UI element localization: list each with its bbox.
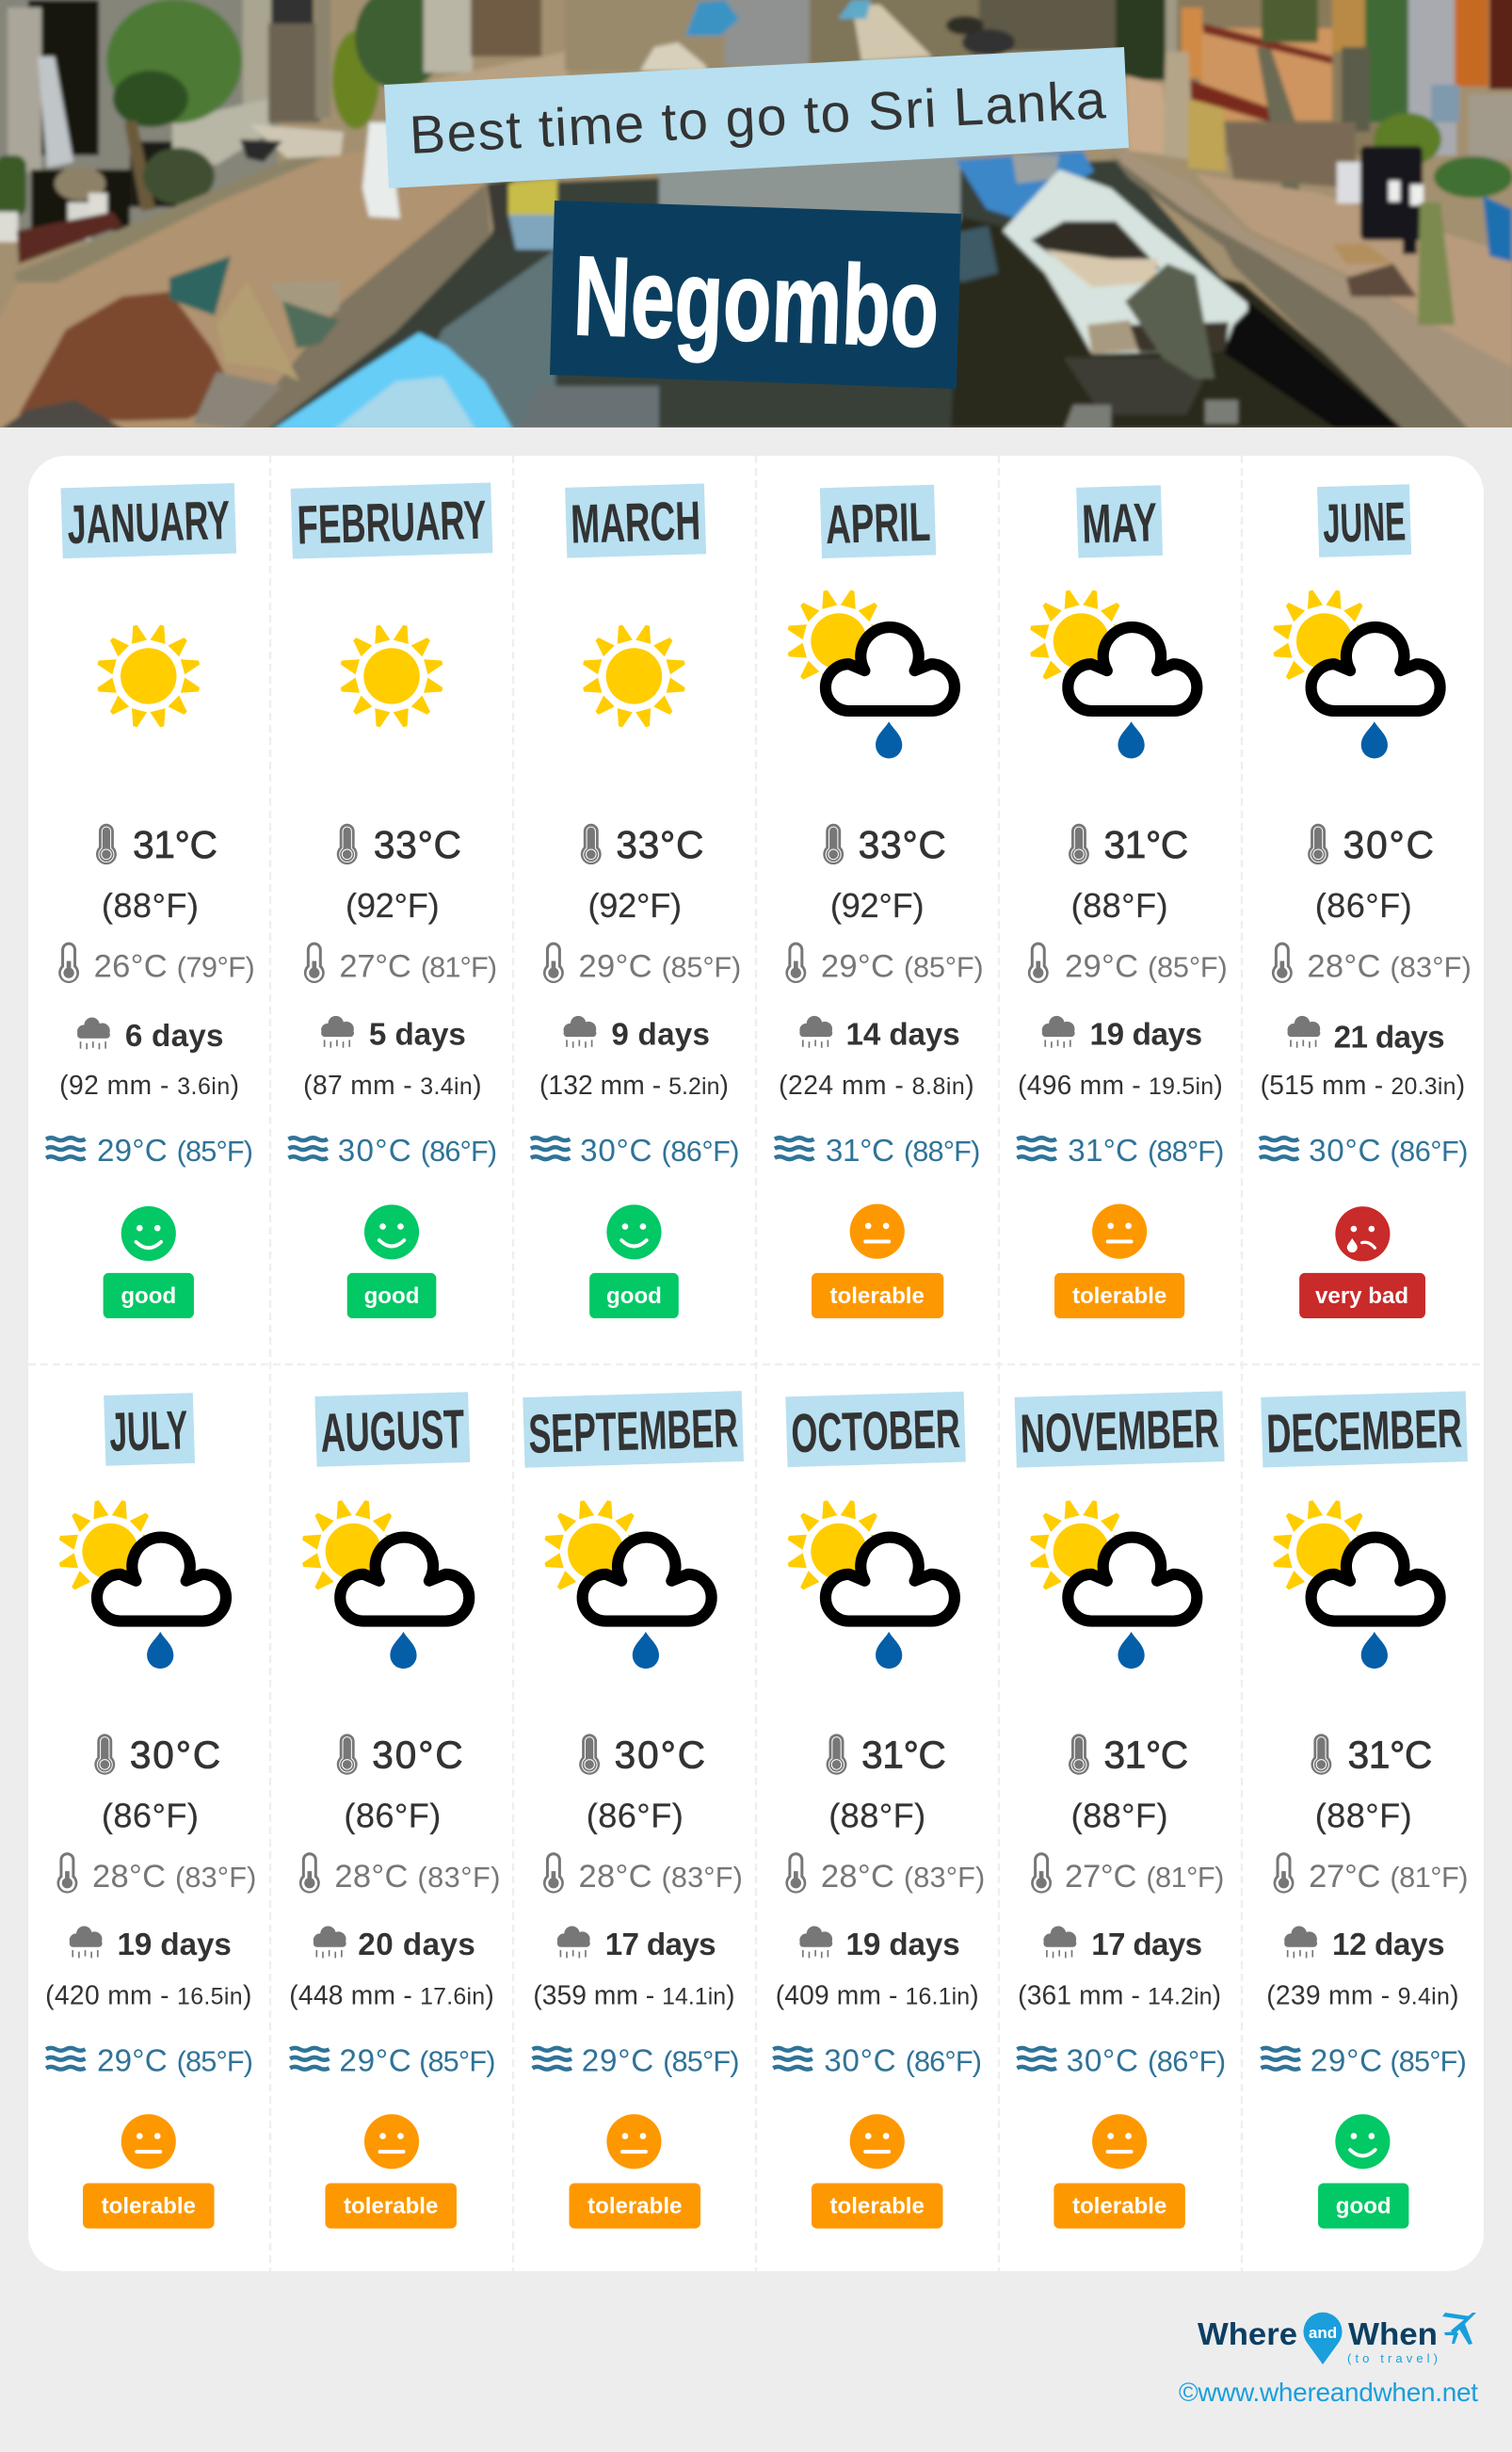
panel: November [1015,1391,1226,2229]
rating: very bad [1299,1206,1425,1318]
sea temperature: (86°F) [662,1135,740,1168]
sea temperature [1017,1134,1224,1169]
icon: sun [582,623,686,729]
high temperature: (88°F) [1315,1796,1412,1834]
low temperature: (83°F) [904,1861,985,1894]
high temperature [337,823,461,925]
logo: Where and When (to travel): When [1348,2316,1438,2351]
high temperature: 33°C [374,823,461,866]
rating: tolerable [812,1204,943,1318]
panel: April [775,485,984,1318]
city banner: Negombo: Negombo [571,233,941,371]
low temperature: (85°F) [1148,951,1228,984]
high temperature [1069,1734,1188,1834]
low temperature: 28°C [821,1859,894,1895]
rainfall: (361 mm - 14.2in) [1018,1980,1221,2010]
rating: tolerable: tolerable [1072,2194,1166,2219]
low temperature: (83°F) [175,1861,256,1894]
month label: September [523,1391,744,1468]
low temperature: 27°C [339,949,411,985]
rating: very bad: very bad [1315,1283,1408,1309]
sea temperature [1260,1134,1468,1169]
month label: August [314,1392,470,1467]
high temperature: 33°C [616,823,703,866]
high temperature [1069,823,1188,925]
month label: May: MAY [1081,492,1158,556]
low temperature: (81°F) [421,951,497,984]
rainfall: 5 days [369,1017,466,1052]
high temperature [827,1734,946,1834]
high temperature [94,1734,220,1834]
sea temperature: 30°C [824,2044,896,2079]
rating: tolerable: tolerable [587,2194,682,2219]
rainfall: (92 mm - 3.6in) [59,1070,239,1100]
white boat [956,151,1094,218]
rainfall [1261,1016,1465,1100]
month label: June: JUNE [1322,491,1407,555]
rainfall: (515 mm - 20.3in) [1261,1070,1465,1100]
panel: March [531,484,741,1318]
high temperature: (92°F) [346,886,440,925]
high temperature: 30°C [130,1734,220,1777]
sea temperature [533,2044,740,2079]
rainfall: (409 mm - 16.1in) [776,1980,979,2010]
high temperature [337,1734,463,1834]
rating: good: good [364,1283,419,1309]
month label: January [61,483,236,558]
low temperature: (85°F) [662,951,741,984]
panel: May [1017,485,1228,1318]
high temperature: (88°F) [1071,1796,1168,1834]
rainfall [1266,1926,1459,2010]
month label: March [565,484,706,558]
high temperature [1308,823,1434,925]
low temperature: 29°C [578,949,652,985]
low temperature [299,1852,500,1895]
low temperature [1031,1852,1224,1895]
low temperature: (85°F) [904,951,984,984]
low temperature: 26°C [94,949,168,985]
sea temperature: (85°F) [419,2045,495,2078]
rating: tolerable: tolerable [344,2194,438,2219]
high temperature: (88°F) [1071,886,1168,925]
rainfall: 19 days [118,1928,232,1962]
sea temperature: (85°F) [1390,2045,1467,2078]
month label: August: AUGUST [320,1398,465,1464]
sea temperature: (86°F) [1390,1135,1468,1168]
month label: July [104,1393,195,1466]
sea temperature [288,1134,497,1169]
high temperature: 30°C [1343,823,1434,866]
month label: April [820,485,936,558]
rainfall [289,1926,494,2010]
rating: tolerable [570,2114,700,2229]
low temperature: 28°C [334,1859,408,1895]
high temperature: 31°C [133,823,217,866]
panel: July [45,1393,256,2229]
rainfall: 20 days [358,1928,475,1962]
rainfall: 6 days [125,1019,223,1054]
header photo: canal in Negombo with moored boats [0,0,1512,433]
rating: good: good [1336,2194,1391,2219]
icon: sun and rain cloud [1029,1499,1197,1669]
icon: sun [96,623,201,729]
month label: February [291,483,492,559]
panel: January [46,483,255,1318]
sea temperature [531,1134,740,1169]
high temperature [1311,1734,1432,1834]
sea temperature: 30°C [1309,1134,1380,1169]
rainfall [45,1926,251,2010]
sea temperature: 31°C [1068,1134,1138,1169]
panel: February [288,483,497,1318]
rating: good: good [606,1283,662,1309]
sea temperature: (85°F) [177,1135,253,1168]
low temperature [304,943,497,985]
low temperature: 27°C [1309,1859,1380,1895]
rainfall: (132 mm - 5.2in) [539,1070,729,1100]
rainfall [533,1926,735,2010]
sea temperature [46,1134,253,1169]
rating: tolerable [1054,2114,1185,2229]
rainfall [1018,1016,1223,1100]
low temperature [1272,943,1472,985]
high temperature: 33°C [859,823,946,866]
rainfall [776,1926,979,2010]
high temperature [579,1734,705,1834]
high temperature: (86°F) [102,1796,199,1834]
rainfall [1018,1926,1221,2010]
rainfall: (496 mm - 19.5in) [1018,1070,1223,1100]
icon: sun and rain cloud [786,1499,955,1669]
panel: October [773,1392,985,2229]
sea temperature [46,2044,253,2079]
rainfall: 19 days [845,1928,960,1962]
panel: June [1260,484,1472,1318]
low temperature [543,943,741,985]
rating: good [1318,2114,1408,2229]
sea temperature: 31°C [826,1134,894,1169]
blue boat foreground [273,332,513,429]
rating: tolerable: tolerable [102,2194,196,2219]
low temperature: 28°C [578,1859,652,1895]
right bank and sand [1196,174,1512,377]
rating: tolerable [812,2114,942,2229]
website credit: ©www.whereandwhen.net [1179,2378,1478,2407]
high temperature: (88°F) [102,886,199,925]
rainfall: (420 mm - 16.5in) [45,1980,251,2010]
low temperature [785,943,984,985]
low temperature [785,1852,985,1895]
rainfall: 19 days [1090,1017,1202,1052]
low temperature [56,1852,256,1895]
sea temperature: (86°F) [906,2045,982,2078]
rainfall: (224 mm - 8.8in) [779,1070,974,1100]
low temperature: 28°C [92,1859,166,1895]
low temperature: 27°C [1065,1859,1136,1895]
sea temperature: 29°C [582,2044,653,2079]
month label: March: MARCH [570,491,701,556]
month label: October: OCTOBER [791,1398,961,1464]
icon: sun and rain cloud [543,1499,712,1669]
sea temperature: 29°C [339,2044,411,2079]
low temperature: (83°F) [417,1861,500,1894]
low temperature [1274,1852,1468,1895]
rainfall [779,1016,974,1100]
month label: November [1015,1391,1225,1468]
icon: sun and rain cloud [300,1499,469,1669]
sea temperature: 29°C [97,1134,168,1169]
low temperature: (81°F) [1390,1861,1468,1894]
month label: October [785,1392,966,1467]
rainfall: 17 days [605,1928,716,1962]
low temperature: (83°F) [662,1861,743,1894]
icon: map pin [1303,2313,1343,2364]
sea temperature: 30°C [580,1134,652,1169]
right houses [1116,0,1172,80]
low temperature [543,1852,743,1895]
centre top [565,0,730,71]
sea temperature [1261,2044,1467,2079]
high temperature: 31°C [1348,1734,1432,1777]
month label: November: NOVEMBER [1020,1397,1220,1465]
rainfall [59,1018,239,1100]
rating: tolerable [1054,1204,1184,1318]
low temperature: (83°F) [1390,951,1472,984]
water [269,158,1222,427]
low temperature: (79°F) [177,951,255,984]
high temperature: 30°C [372,1734,463,1777]
rating: tolerable: tolerable [1072,1283,1166,1309]
icon: sun [339,623,444,729]
month label: January: JANUARY [67,490,231,556]
high temperature: (86°F) [1315,886,1412,925]
rating: good [104,1206,194,1318]
panel: monthly climate card [28,456,1484,2271]
month label: May [1076,485,1163,558]
sea temperature: (88°F) [1148,1135,1224,1168]
rating: tolerable: tolerable [830,1283,925,1309]
rating: good [589,1204,679,1318]
high temperature: (86°F) [344,1796,441,1834]
rainfall: 9 days [611,1017,710,1052]
panel: August [289,1392,500,2229]
laundry [1360,146,1423,240]
rainfall: (87 mm - 3.4in) [303,1070,482,1100]
icon: sun and rain cloud [1272,589,1440,758]
sea temperature [1017,2044,1226,2079]
rating: tolerable [83,2114,215,2229]
sea temperature: 30°C [338,1134,411,1169]
high temperature: 31°C [1104,1734,1188,1777]
month label: June [1317,484,1411,557]
left houses [0,0,278,242]
high temperature: (92°F) [830,886,925,925]
month label: February: FEBRUARY [297,490,487,557]
sea temperature: (85°F) [177,2045,253,2078]
high temperature: 31°C [861,1734,946,1777]
high temperature: (92°F) [587,886,682,925]
sea temperature: (86°F) [1148,2045,1226,2078]
rating: tolerable [325,2114,457,2229]
icon: map pin: and [1309,2324,1337,2342]
icon: airplane [1442,2313,1476,2345]
high temperature: 30°C [615,1734,705,1777]
rainfall: 17 days [1091,1928,1202,1962]
sea temperature [775,1134,980,1169]
logo: Where and When (to travel) [1198,2313,1476,2365]
month label: July: JULY [108,1399,188,1463]
rating: good [347,1204,436,1318]
low wall and sand path [15,156,321,282]
sea temperature: (85°F) [663,2045,740,2078]
logo: Where and When (to travel): (to travel) [1347,2351,1438,2365]
low temperature: 28°C [1307,949,1380,985]
sea temperature: 30°C [1067,2044,1138,2079]
rainfall: (239 mm - 9.4in) [1266,1980,1459,2010]
high temperature: (86°F) [587,1796,684,1834]
city banner: Negombo [550,201,961,389]
sea temperature [290,2044,495,2079]
low temperature: (81°F) [1146,1861,1224,1894]
title banner: Best time to go to Sri Lanka [384,47,1129,188]
title banner: Best time to go to Sri Lanka: Best time to go to Sri Lanka [408,70,1107,166]
high temperature: 31°C [1104,823,1188,866]
rainfall [303,1016,482,1100]
sea temperature: (86°F) [421,1135,497,1168]
panel: December [1261,1391,1468,2229]
sea temperature [773,2044,982,2079]
rainfall [539,1016,729,1100]
rainfall: 14 days [845,1017,960,1052]
rainfall: (359 mm - 14.1in) [533,1980,735,2010]
icon: sun and rain cloud [57,1499,226,1669]
rainfall: 21 days [1334,1021,1445,1056]
low temperature: 29°C [1065,949,1138,985]
month label: September: SEPTEMBER [527,1397,739,1465]
sea temperature: 29°C [97,2044,168,2079]
yellow boat [485,181,515,230]
sea temperature: (88°F) [904,1135,980,1168]
icon: sun and rain cloud [1029,589,1197,758]
low temperature [1028,943,1228,985]
low temperature: 29°C [821,949,894,985]
high temperature: (88°F) [828,1796,925,1834]
high temperature [823,823,946,925]
icon: sun and rain cloud [786,589,955,758]
icon: sun and rain cloud [1272,1499,1440,1669]
panel: September [523,1391,744,2229]
high temperature [581,823,703,925]
rainfall: 12 days [1332,1928,1445,1962]
rating: good: good [121,1283,176,1309]
low temperature [58,943,255,985]
sea temperature: 29°C [1311,2044,1382,2079]
net pile and tarps [19,292,235,421]
month label: April: APRIL [825,492,931,556]
high temperature [96,823,217,925]
logo: Where and When (to travel): Where [1198,2316,1297,2351]
rainfall: (448 mm - 17.6in) [289,1980,494,2010]
rating: tolerable: tolerable [830,2194,925,2219]
